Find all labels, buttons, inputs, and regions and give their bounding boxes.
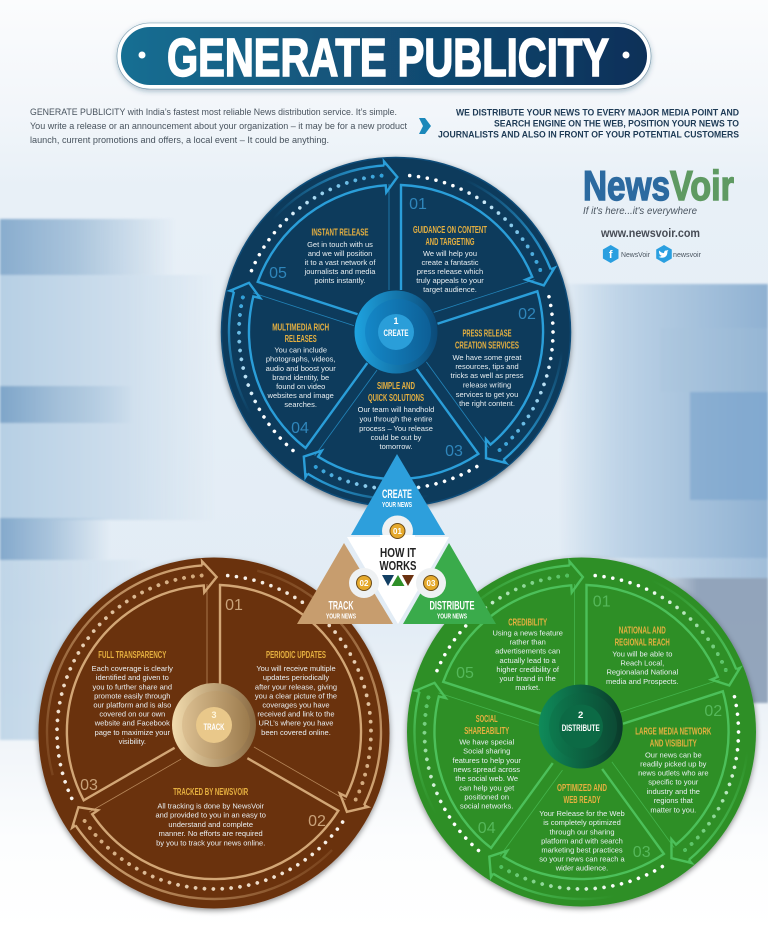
- triangle: create your news: YOUR NEWS: [382, 502, 412, 509]
- intro text: launch, current promotions and offers, a local event – It could be anything.: [30, 135, 329, 146]
- text: social shareability: [453, 713, 521, 810]
- text: tracked by newsvoir: [155, 786, 266, 847]
- text: large media network and visibility: Our news can be: [645, 750, 702, 759]
- text: tracked by newsvoir: by you to track your news online.: [156, 838, 265, 847]
- triangle: track your news: TRACK: [328, 598, 354, 612]
- text: credibility: CREDIBILITY: [508, 616, 547, 628]
- panel: distribute wheel: 05: [456, 665, 474, 682]
- text: full transparency: Each coverage is clearly: [92, 664, 173, 673]
- text: guidance on content and targeting: AND TARGETING: [426, 236, 474, 248]
- text: national and regional reach: Reach Local,: [620, 659, 664, 668]
- text: periodic updates: you a clear picture of the: [255, 692, 337, 700]
- NewsVoir logo and contact: Voir: [670, 162, 734, 209]
- text: simple and quick solutions: [358, 380, 434, 451]
- text: large media network and visibility: AND VISIBILITY: [650, 738, 697, 750]
- triangle: distribute your news: YOUR NEWS: [437, 614, 467, 620]
- text: guidance on content and targeting: We will help you: [423, 249, 477, 258]
- text: multimedia rich releases: brand identity, be: [272, 373, 329, 382]
- text: full transparency: identified and given to: [96, 673, 169, 682]
- text: tracked by newsvoir: understand and complete: [168, 820, 253, 829]
- text: simple and quick solutions: SIMPLE AND: [377, 380, 415, 392]
- text: credibility: market.: [515, 683, 540, 692]
- text: press release creation services: services to get you: [456, 390, 518, 399]
- text: optimized and web ready: wider audience.: [555, 864, 608, 873]
- text: large media network and visibility: LARGE MEDIA NETWORK: [635, 726, 712, 738]
- text: large media network and visibility: industry and the: [647, 787, 700, 796]
- text: instant release: points instantly.: [314, 276, 366, 285]
- text: instant release: journalists and media: [304, 267, 376, 276]
- text: simple and quick solutions: could be out by: [371, 433, 422, 442]
- text: guidance on content and targeting: truly appeals to your: [416, 276, 484, 285]
- text: periodic updates: [255, 649, 337, 737]
- text: multimedia rich releases: MULTIMEDIA RICH: [272, 322, 329, 334]
- text: press release creation services: resources, tips and: [455, 362, 519, 371]
- text: press release creation services: We have some great: [452, 353, 522, 362]
- text: national and regional reach: REGIONAL REACH: [615, 636, 670, 648]
- how it works diagram: [297, 454, 496, 624]
- text: press release creation services: [451, 328, 524, 408]
- text: social shareability: SHAREABILITY: [464, 725, 509, 737]
- how it works label: WORKS: [380, 559, 416, 573]
- text: full transparency: you to further share and: [92, 682, 172, 692]
- text: social shareability: We have special: [459, 738, 514, 747]
- panel: track wheel: 02: [308, 813, 326, 830]
- panel: distribute wheel: 04: [478, 820, 496, 837]
- title banner: GENERATE PUBLICITY: [167, 28, 609, 88]
- white backing triangle: [347, 537, 449, 624]
- text: periodic updates: URL’s where you have: [259, 719, 333, 728]
- intro text: [30, 107, 407, 146]
- text: tracked by newsvoir: TRACKED BY NEWSVOIR: [173, 786, 248, 798]
- text: full transparency: visibility.: [119, 737, 146, 746]
- text: guidance on content and targeting: GUIDANCE ON CONTENT: [413, 224, 487, 236]
- NewsVoir logo and contact: [583, 162, 734, 263]
- hub: distribute: DISTRIBUTE: [562, 723, 600, 734]
- hub: create: [354, 290, 438, 374]
- text: simple and quick solutions: process – You release: [359, 424, 433, 433]
- text: large media network and visibility: news outlets who are: [638, 769, 709, 778]
- how it works label: [380, 546, 416, 586]
- text: full transparency: website and Facebook: [94, 719, 170, 728]
- text: guidance on content and targeting: create a fantastic: [421, 258, 479, 267]
- distribution statement: WE DISTRIBUTE YOUR NEWS TO EVERY MAJOR MEDIA POINT AND: [456, 108, 739, 118]
- text: simple and quick solutions: you through the entire: [360, 414, 432, 424]
- text: periodic updates: coverages you have: [262, 700, 330, 710]
- text: large media network and visibility: matter to you.: [650, 805, 696, 814]
- text: multimedia rich releases: RELEASES: [285, 333, 317, 345]
- text: guidance on content and targeting: [413, 224, 487, 294]
- text: social shareability: news spread across: [453, 765, 520, 774]
- text: social shareability: can help you get: [459, 783, 515, 792]
- panel: track wheel: 03: [80, 777, 98, 794]
- triangle: create your news: [351, 454, 445, 535]
- NewsVoir logo and contact: If it's here...it's everywhere: [583, 206, 697, 217]
- text: full transparency: [92, 649, 173, 746]
- panel: create wheel: 04: [291, 420, 309, 437]
- text: full transparency: FULL TRANSPARENCY: [98, 649, 166, 661]
- intro text: GENERATE PUBLICITY with India’s fastest most reliable News distribution service. It’s simple.: [30, 107, 397, 118]
- text: periodic updates: received and link to the: [257, 710, 335, 719]
- distribution statement: JOURNALISTS AND ALSO IN FRONT OF YOUR POTENTIAL CUSTOMERS: [438, 130, 739, 140]
- hub: create: CREATE: [384, 328, 408, 339]
- text: instant release: INSTANT RELEASE: [312, 226, 368, 238]
- panel: distribute wheel: [358, 531, 768, 932]
- text: credibility: Using a news feature: [492, 629, 563, 638]
- text: periodic updates: updates periodically: [263, 673, 329, 682]
- text: optimized and web ready: Your Release for the Web: [539, 809, 625, 818]
- text: optimized and web ready: marketing best practices: [541, 846, 623, 855]
- badge: 01: 01: [393, 527, 402, 536]
- text: optimized and web ready: is completely optimized: [543, 818, 621, 827]
- text: simple and quick solutions: QUICK SOLUTIONS: [368, 392, 424, 404]
- badge: 03: [416, 568, 446, 598]
- badge: 01: [380, 516, 415, 547]
- text: national and regional reach: [606, 624, 679, 686]
- text: optimized and web ready: platform and with search: [541, 836, 623, 845]
- text: large media network and visibility: [635, 726, 712, 814]
- text: optimized and web ready: [539, 782, 626, 873]
- hub: track: 3: [211, 710, 217, 720]
- text: instant release: [304, 226, 376, 285]
- text: press release creation services: the right content.: [459, 399, 515, 408]
- triangle: create your news: CREATE: [382, 487, 412, 501]
- text: periodic updates: been covered online.: [261, 728, 331, 737]
- NewsVoir logo and contact: www.newsvoir.com: [600, 226, 700, 240]
- panel: create wheel: [173, 131, 598, 556]
- text: credibility: rather than: [510, 638, 546, 647]
- text: social shareability: the social web. We: [455, 774, 518, 783]
- hub: track: TRACK: [204, 722, 225, 733]
- text: optimized and web ready: OPTIMIZED AND: [557, 782, 607, 794]
- text: full transparency: covered on our own: [99, 710, 165, 719]
- text: optimized and web ready: so your news can reach a: [539, 855, 626, 864]
- NewsVoir logo and contact: News: [583, 162, 670, 209]
- panel: distribute wheel: 03: [633, 844, 651, 861]
- panel: track wheel: 01: [225, 597, 243, 614]
- triangle: track your news: YOUR NEWS: [326, 614, 356, 620]
- NewsVoir logo and contact: newsvoir: [673, 250, 701, 259]
- text: credibility: actually lead to a: [500, 656, 557, 665]
- distribution statement: SEARCH ENGINE ON THE WEB, POSITION YOUR NEWS TO: [494, 118, 739, 128]
- triangle: distribute your news: [403, 543, 496, 624]
- text: periodic updates: PERIODIC UPDATES: [266, 649, 326, 661]
- panel: track wheel: [0, 547, 390, 932]
- text: tracked by newsvoir: manner. No efforts are required: [159, 829, 263, 838]
- text: social shareability: SOCIAL: [476, 713, 498, 725]
- text: multimedia rich releases: You can include: [274, 346, 327, 354]
- text: social shareability: social networks.: [460, 801, 513, 810]
- text: press release creation services: release writing: [463, 380, 511, 390]
- text: tracked by newsvoir: All tracking is done by NewsVoir: [157, 802, 265, 811]
- text: instant release: it to a vast network of: [305, 258, 376, 267]
- panel: create wheel: 03: [445, 443, 463, 460]
- text: optimized and web ready: WEB READY: [564, 794, 600, 806]
- text: social shareability: positioned on: [464, 792, 509, 801]
- text: large media network and visibility: readily picked up by: [640, 759, 707, 768]
- text: optimized and web ready: through our sharing: [549, 827, 615, 836]
- text: press release creation services: PRESS RELEASE: [462, 328, 512, 340]
- text: large media network and visibility: specific to your: [648, 778, 699, 787]
- text: press release creation services: tricks as well as press: [451, 371, 524, 380]
- text: multimedia rich releases: [266, 322, 336, 409]
- text: multimedia rich releases: found on video: [276, 382, 325, 391]
- panel: create wheel: 01: [409, 196, 427, 213]
- text: credibility: advertisements can: [495, 647, 560, 656]
- text: national and regional reach: Regionaland National: [606, 668, 678, 677]
- text: credibility: your brand in the: [500, 674, 556, 683]
- text: multimedia rich releases: websites and image: [267, 391, 334, 400]
- hub: create: 1: [393, 316, 399, 326]
- text: guidance on content and targeting: target audience.: [423, 285, 477, 294]
- hub: track: [172, 683, 256, 767]
- panel: create wheel: 02: [518, 306, 536, 323]
- text: guidance on content and targeting: press release which: [417, 267, 483, 276]
- text: multimedia rich releases: searches.: [284, 400, 317, 409]
- text: instant release: and we will position: [308, 249, 372, 258]
- text: simple and quick solutions: Our team will handhold: [358, 405, 434, 414]
- text: multimedia rich releases: photographs, videos,: [266, 355, 336, 364]
- panel: create wheel: 05: [269, 265, 287, 282]
- panel: distribute wheel: 02: [704, 703, 722, 720]
- text: full transparency: promote easily through: [94, 692, 170, 700]
- NewsVoir logo and contact: f: [609, 249, 613, 261]
- text: periodic updates: You will receive multiple: [256, 664, 336, 673]
- how it works label: HOW IT: [380, 546, 416, 560]
- badge: 03: 03: [427, 579, 436, 588]
- hub: distribute: [539, 684, 623, 768]
- badge: 02: [349, 568, 379, 598]
- badge: 02: 02: [360, 579, 369, 588]
- text: instant release: Get in touch with us: [307, 240, 373, 249]
- triangle: distribute your news: DISTRIBUTE: [430, 598, 474, 612]
- panel: distribute wheel: 01: [593, 594, 611, 611]
- text: social shareability: features to help your: [453, 756, 521, 765]
- distribution statement: [438, 108, 739, 140]
- intro text: You write a release or an announcement about your organization – it may be for a new product: [30, 121, 407, 132]
- NewsVoir logo and contact: NewsVoir: [621, 250, 650, 259]
- text: full transparency: page to maximize your: [95, 728, 171, 737]
- text: credibility: [492, 616, 563, 692]
- text: tracked by newsvoir: and provided to you in an easy to: [155, 811, 266, 820]
- title banner: [117, 23, 651, 89]
- text: social shareability: Social sharing: [463, 747, 510, 756]
- text: large media network and visibility: regions that: [654, 796, 694, 805]
- hub: distribute: 2: [578, 710, 583, 721]
- text: multimedia rich releases: audio and boost your: [266, 364, 336, 373]
- arrow: intro to distribution statement: [419, 118, 431, 134]
- text: credibility: higher credibility of: [496, 665, 560, 674]
- text: press release creation services: CREATION SERVICES: [455, 340, 519, 352]
- text: national and regional reach: You will be able to: [612, 650, 672, 659]
- text: periodic updates: after your release, giving: [255, 682, 337, 692]
- text: national and regional reach: media and Prospects.: [606, 677, 679, 686]
- text: national and regional reach: NATIONAL AND: [619, 624, 666, 636]
- text: simple and quick solutions: tomorrow.: [380, 442, 412, 451]
- text: full transparency: our platform and is also: [93, 700, 171, 710]
- triangle: track your news: [297, 543, 393, 624]
